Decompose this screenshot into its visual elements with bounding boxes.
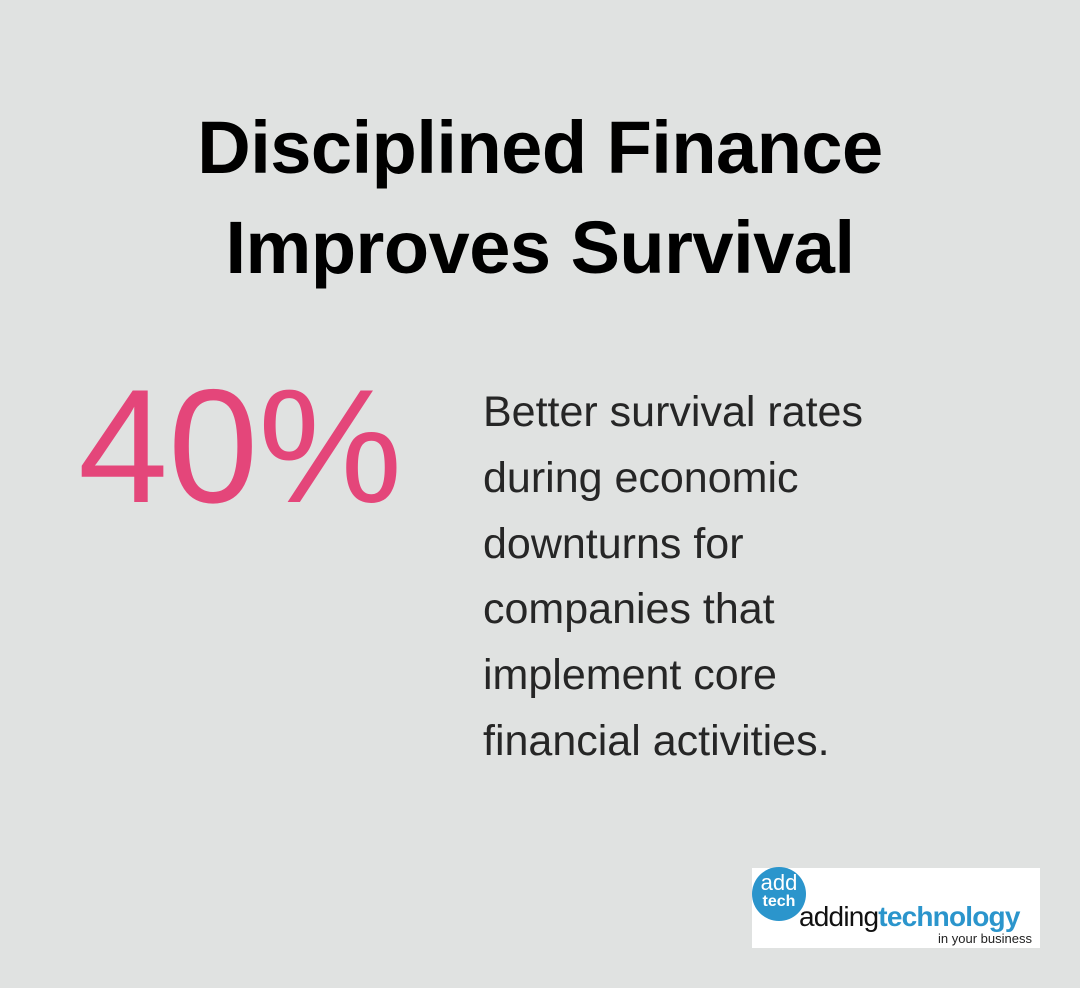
logo tagline: in your business	[938, 931, 1032, 946]
description text: during economic	[483, 454, 799, 502]
description text: Better survival rates	[483, 388, 863, 436]
title: Improves Survival	[225, 206, 855, 289]
title: Disciplined Finance	[197, 106, 883, 189]
description text: implement core	[483, 651, 777, 699]
description text: financial activities.	[483, 717, 830, 765]
title	[197, 106, 883, 289]
logo circle: add	[761, 870, 797, 895]
description text: companies that	[483, 585, 775, 633]
logo: adding technology	[752, 868, 1040, 948]
logo circle: tech	[763, 893, 795, 910]
description text: downturns for	[483, 520, 744, 568]
logo circle	[752, 867, 806, 921]
description text	[483, 388, 863, 765]
statistic: 40%: 40%	[78, 356, 402, 537]
logo wordmark: addingtechnology	[799, 901, 1020, 932]
